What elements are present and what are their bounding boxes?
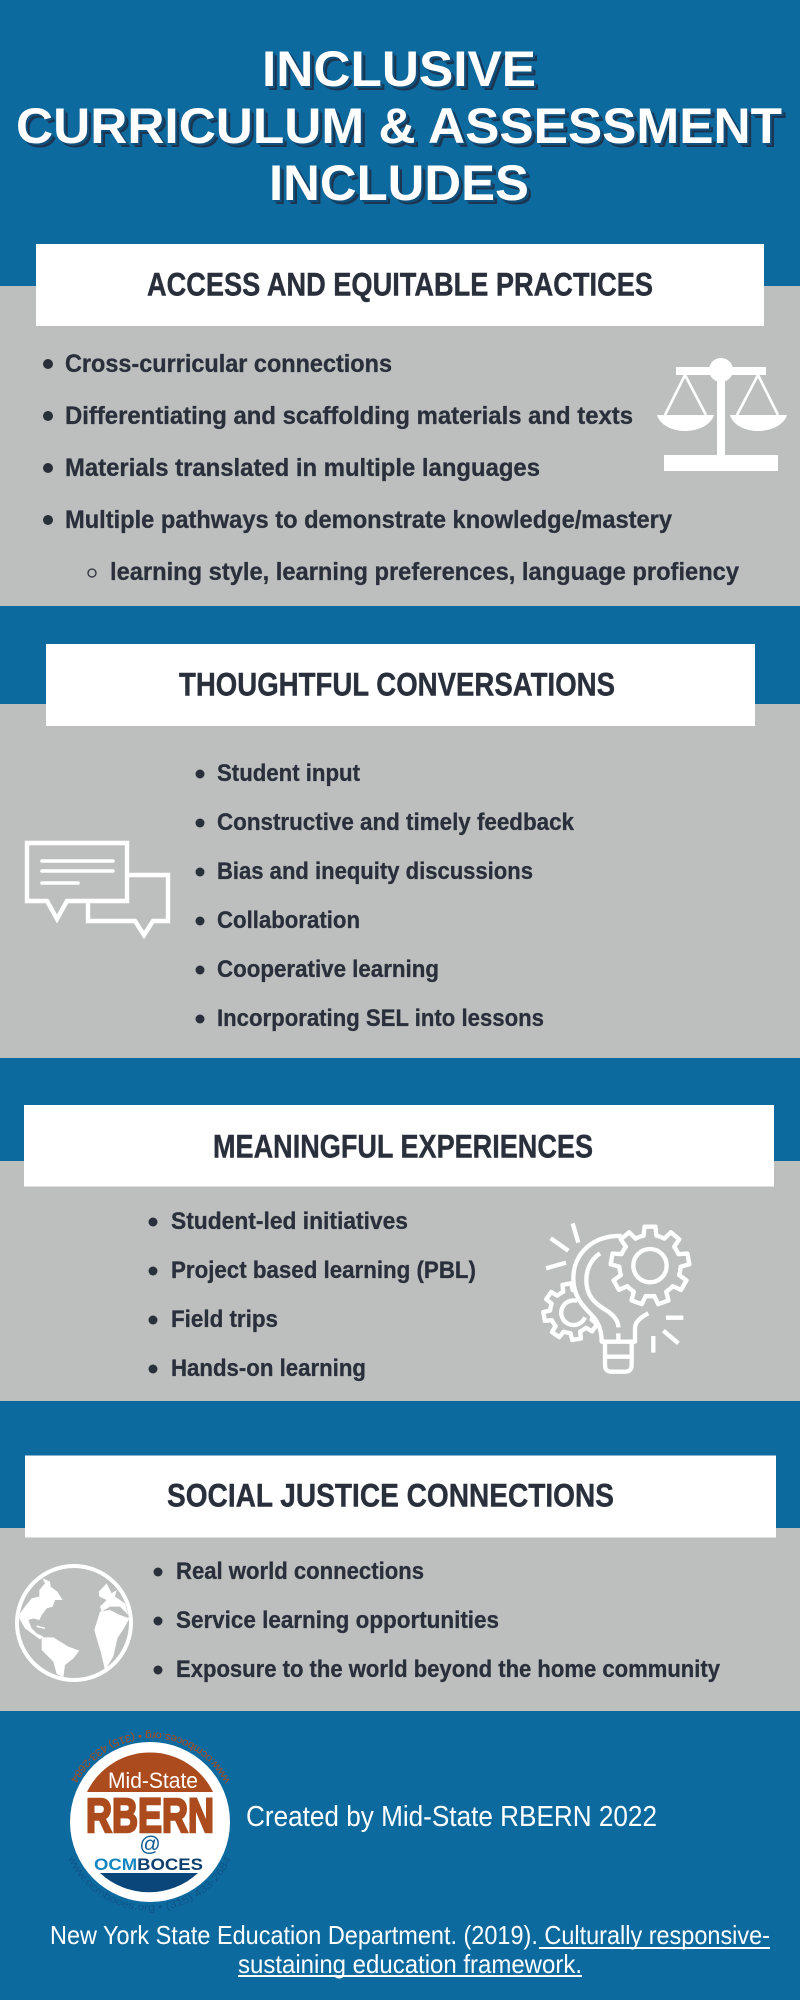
list: social justice items: Service learning opportunities [176,1607,499,1634]
list: conversation items: Cooperative learning [217,956,439,983]
list: conversation items: Incorporating SEL into lessons [217,1005,544,1032]
icon: globe [17,1566,131,1680]
list: access items: Materials translated in multiple languages [65,454,540,482]
logo: Mid-State RBERN at OCM BOCES: OCMBOCES [94,1855,203,1874]
title: INCLUSIVE [262,41,536,97]
panel: meaningful experiences [0,1105,800,1401]
list: experience items: Field trips [171,1306,278,1333]
list: social justice items: Exposure to the world beyond the home community [176,1656,721,1683]
list: conversation items: Constructive and timely feedback [217,809,575,836]
logo: Mid-State RBERN at OCM BOCES: www.ocmboces.org • (315) 433-2684 [68,1856,230,1913]
logo: Mid-State RBERN at OCM BOCES: www.ocmboces.org • (315) 433-2684 [71,1730,230,1784]
logo: Mid-State RBERN at OCM BOCES: Mid-State [108,1768,198,1793]
heading: social justice connections: SOCIAL JUSTICE CONNECTIONS [167,1478,614,1514]
list: experience items: Project based learning (PBL) [171,1257,476,1284]
icon: lightbulb with gears [542,1223,690,1372]
panel: access and equitable practices [0,244,800,606]
list: conversation items: Collaboration [217,907,360,934]
title: INCLUDES [269,155,529,211]
logo: Mid-State RBERN at OCM BOCES: RBERN [86,1790,214,1843]
panel: thoughtful conversations [0,644,800,1058]
list: conversation items: Bias and inequity discussions [217,858,533,885]
list: social justice items [154,1558,721,1683]
icon: speech bubbles [27,843,168,935]
heading: meaningful experiences: MEANINGFUL EXPERIENCES [213,1128,593,1164]
heading: thoughtful conversations: THOUGHTFUL CONVERSATIONS [179,666,615,702]
title [16,41,782,211]
list: access items: Differentiating and scaffolding materials and texts [65,402,633,430]
panel: social justice connections [0,1456,800,1711]
icon: balance scales [657,358,787,471]
logo: Mid-State RBERN at OCM BOCES [68,1730,230,1913]
list: social justice items: Real world connections [176,1558,424,1585]
list: conversation items: Student input [217,760,360,787]
citation: sustaining education framework. [238,1949,582,1979]
logo: Mid-State RBERN at OCM BOCES: @ [139,1833,161,1856]
credit: created by: Created by Mid-State RBERN 2022 [246,1801,657,1833]
list: access items: Multiple pathways to demonstrate knowledge/mastery [65,506,672,534]
list: experience items [148,1208,476,1382]
list: access items: learning style, learning preferences, language profiency [110,558,739,586]
list: access items [43,350,739,586]
title: CURRICULUM & ASSESSMENT [16,98,782,154]
list: experience items: Hands-on learning [171,1355,366,1382]
list: conversation items [196,760,575,1032]
citation [50,1920,770,1979]
list: access items: Cross-curricular connections [65,350,392,378]
heading: access and equitable practices: ACCESS AND EQUITABLE PRACTICES [147,266,653,302]
list: experience items: Student-led initiatives [171,1208,408,1235]
